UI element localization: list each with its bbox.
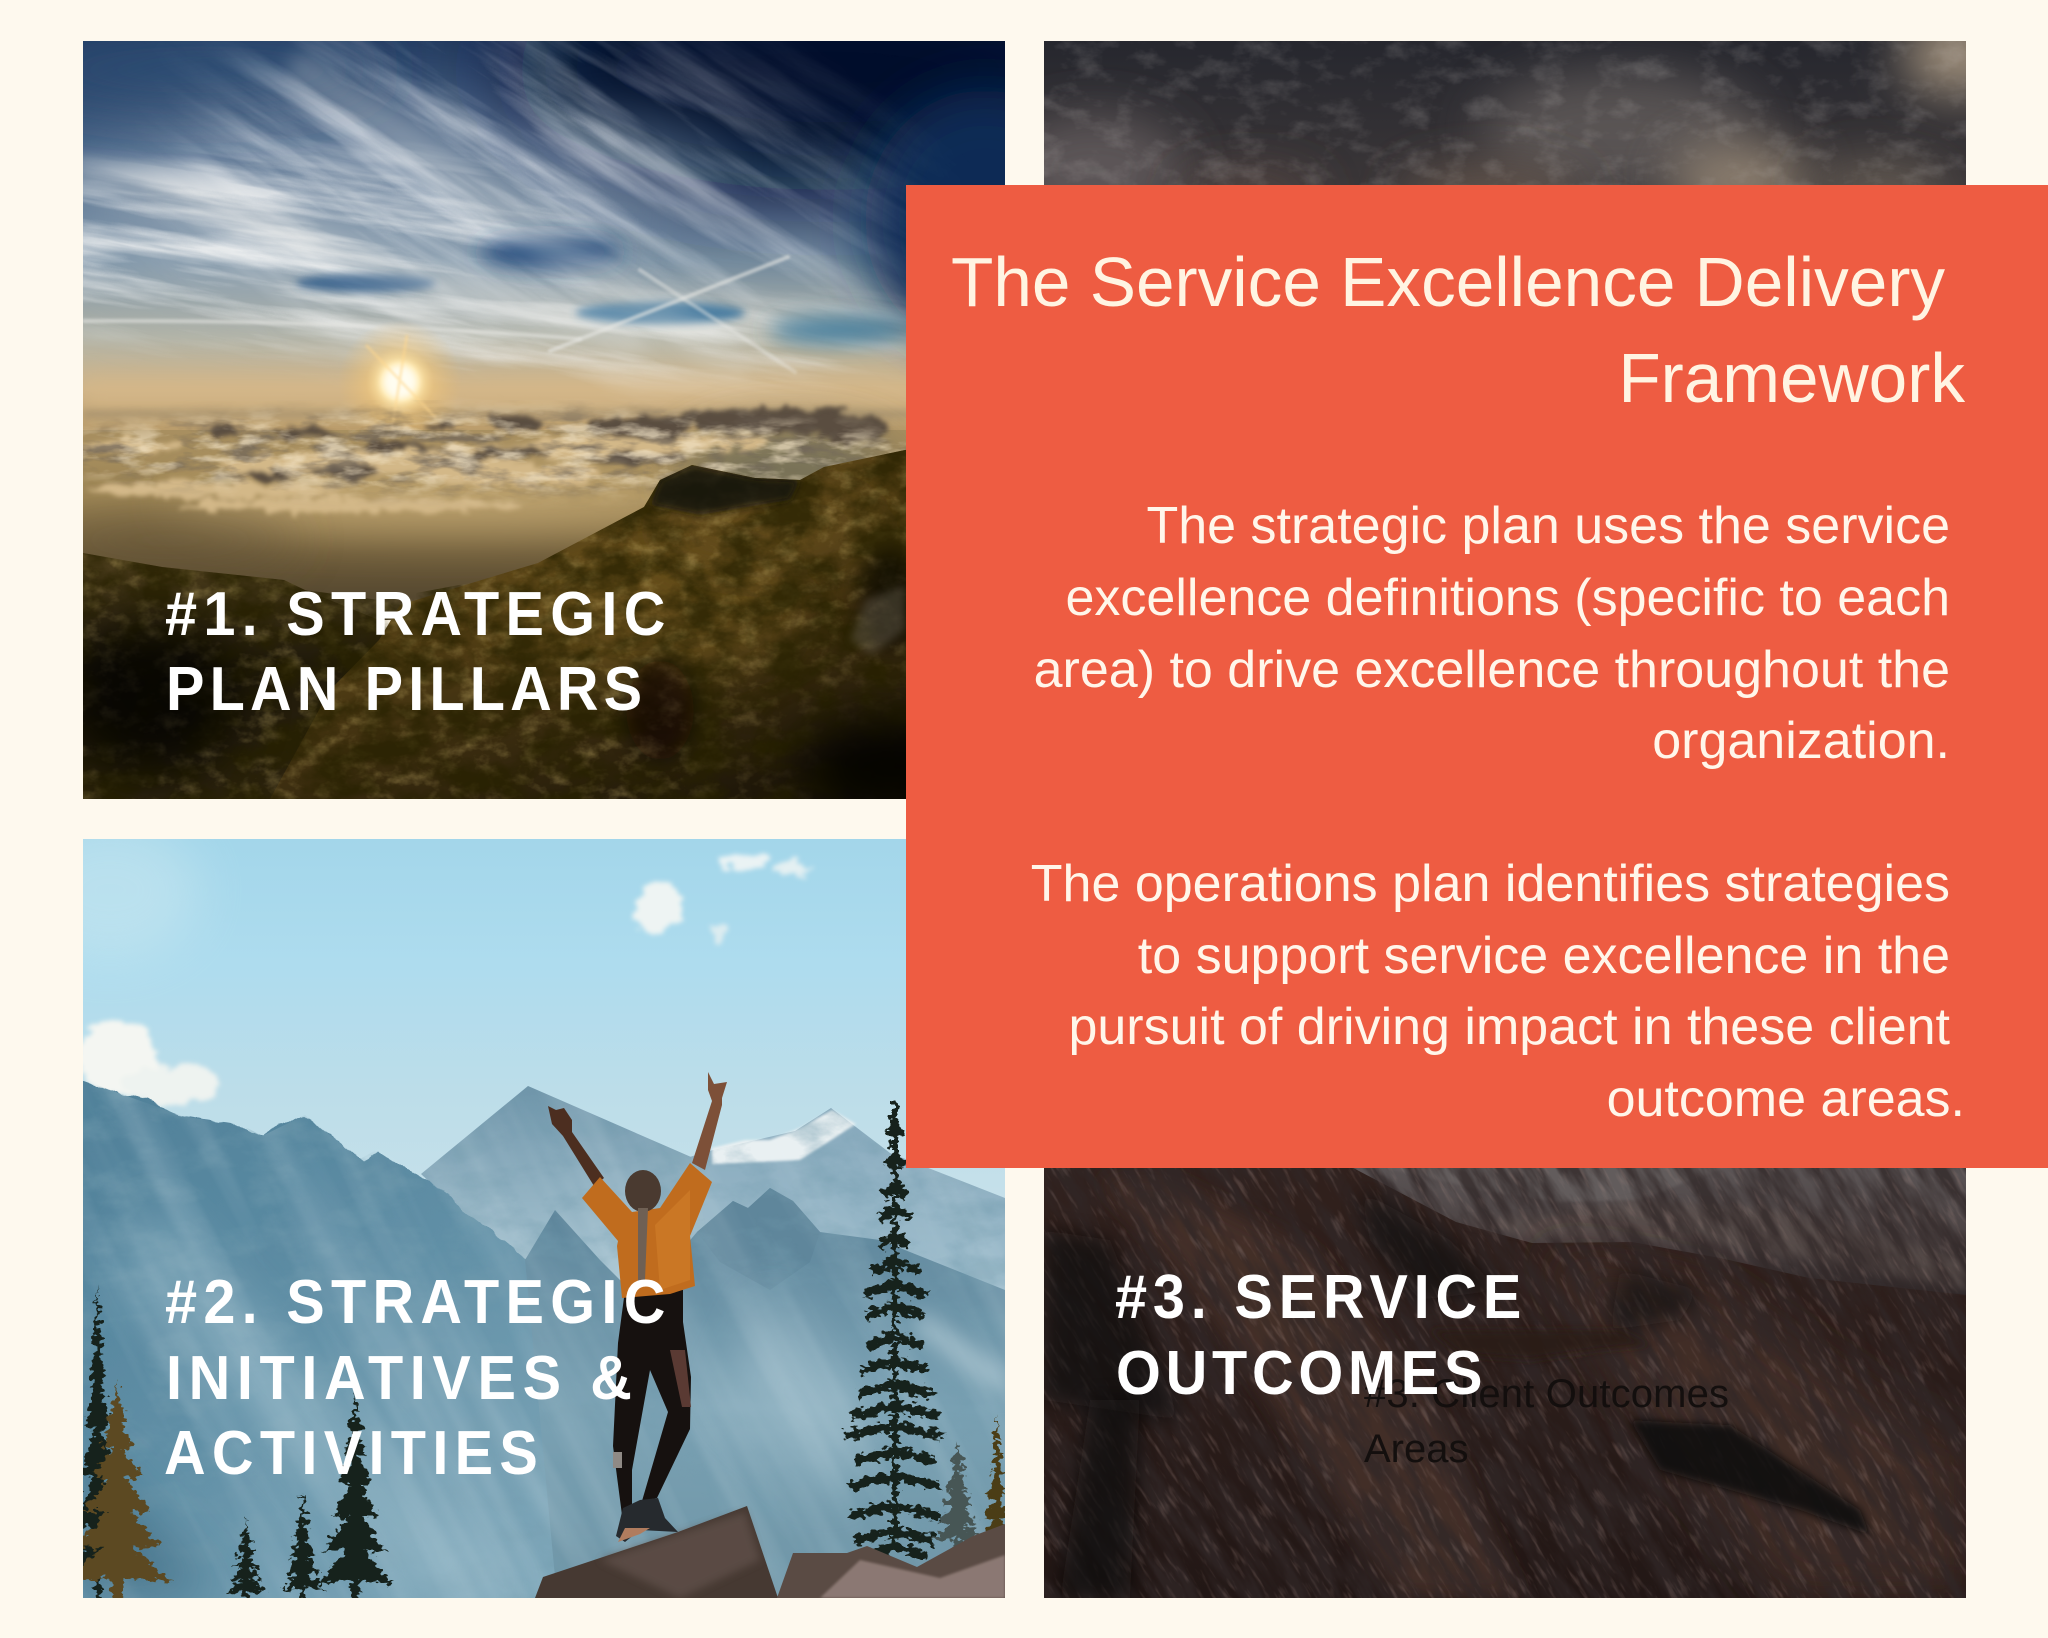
photo: trees [62, 1101, 1011, 1604]
hidden text: #3. Client Outcomes Areas [1364, 1372, 1729, 1471]
leggings letter [613, 1452, 622, 1468]
heading: #2. strategic initiatives and activities: INITIATIVES & [166, 1343, 632, 1412]
shirt [582, 1163, 712, 1298]
boots [616, 1498, 678, 1542]
photo: centre mountain peak [421, 1086, 690, 1280]
photo: ridge texture [83, 450, 906, 799]
heading: #1. strategic plan pillars: PLAN PILLARS [166, 654, 642, 723]
photo: dark brown mountain [1044, 1150, 1966, 1600]
text block: operations plan [1031, 855, 1965, 1128]
arms [548, 1106, 604, 1186]
photo: left mountain range [83, 1081, 555, 1598]
text block: strategic plan: area) to drive excellence throughout the [1034, 641, 1950, 699]
text block: strategic plan [1034, 497, 1950, 770]
text block: operations plan: outcome areas. [1607, 1070, 1965, 1128]
heading: #3. service outcomes [1115, 1262, 1521, 1407]
hidden text: #3. Client Outcomes Areas: #3. Client Outcomes [1364, 1372, 1729, 1416]
text block: operations plan: The operations plan identifies strategies [1031, 855, 1950, 913]
title [951, 243, 1965, 417]
heading: #3. service outcomes: #3. SERVICE [1115, 1262, 1521, 1331]
panel: #2 strategic initiatives photo [83, 839, 1005, 1598]
heading: #1. strategic plan pillars: #1. STRATEGIC [165, 579, 665, 648]
heading: #1. strategic plan pillars [165, 579, 665, 723]
photo: foreground left hill [83, 553, 382, 799]
photo: woman with raised arms [548, 1072, 727, 1542]
text block: operations plan: to support service excellence in the [1138, 927, 1950, 985]
photo: blue sky and clouds [83, 839, 1005, 1198]
text block: strategic plan: excellence definitions (specific to each [1066, 569, 1950, 627]
photo: right snowy peaks [690, 1108, 1005, 1290]
text block: operations plan: pursuit of driving impact in these client [1068, 998, 1951, 1056]
panel: #3 service outcomes photo [1005, 15, 2020, 1600]
icon: sun with lens flare [350, 325, 450, 430]
heading: #2. strategic initiatives and activities: #2. STRATEGIC [165, 1267, 665, 1336]
hidden text: #3. Client Outcomes Areas: Areas [1364, 1427, 1468, 1471]
photo: grassy mountain ridge [271, 450, 906, 799]
heading: #2. strategic initiatives and activities: ACTIVITIES [164, 1418, 538, 1487]
photo: sunrise sky with contrails [83, 41, 1005, 430]
photo: boulders [535, 1506, 1005, 1598]
panel: #1 strategic plan pillars photo [83, 41, 1005, 799]
heading: #2. strategic initiatives and activities [164, 1267, 665, 1487]
title: The Service Excellence Delivery [951, 243, 1945, 321]
photo: middle mountain layers [83, 1080, 1030, 1630]
title: Framework [1618, 339, 1965, 417]
text block: strategic plan: The strategic plan uses the service [1146, 497, 1950, 555]
panel: framework description [906, 185, 2048, 1168]
heading: #3. service outcomes: OUTCOMES [1116, 1338, 1482, 1407]
photo: golden sea of clouds [83, 399, 906, 620]
text block: strategic plan: organization. [1652, 712, 1950, 770]
photo: stormy sky [1005, 15, 2020, 225]
legs [613, 1290, 691, 1515]
head and hair [625, 1170, 661, 1212]
